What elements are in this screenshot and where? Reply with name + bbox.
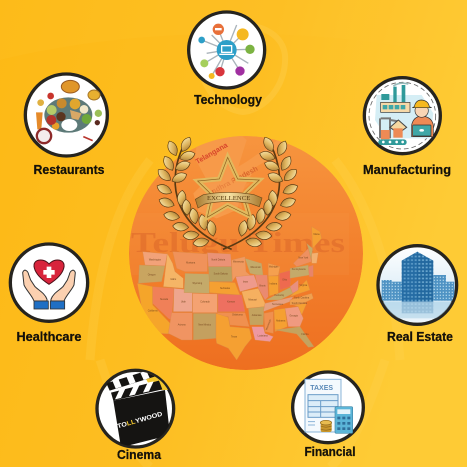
icon: manufacturing bbox=[364, 78, 440, 154]
USA map: Georgia bbox=[290, 315, 298, 318]
right hand bbox=[51, 270, 75, 301]
USA map: Minnesota bbox=[233, 261, 244, 264]
label: Manufacturing: Manufacturing bbox=[363, 163, 451, 177]
label: Restaurants: Restaurants bbox=[34, 163, 105, 177]
icon: healthcare bbox=[10, 244, 88, 321]
USA map: Ohio bbox=[282, 280, 288, 282]
USA map: Texas bbox=[231, 336, 238, 338]
USA map: Mississippi bbox=[266, 319, 272, 331]
USA map: Utah bbox=[181, 301, 186, 304]
left hand bbox=[23, 270, 47, 301]
Telugu states map bbox=[194, 136, 281, 218]
USA map: Iowa bbox=[243, 282, 248, 284]
central orange circle bbox=[129, 126, 363, 370]
laurel wreath bbox=[155, 135, 299, 249]
USA map: Wyoming bbox=[192, 283, 203, 285]
USA map: North Carolina bbox=[294, 296, 310, 299]
USA map bbox=[137, 227, 322, 360]
label: Healthcare: Healthcare bbox=[16, 330, 82, 344]
USA map: Virginia bbox=[299, 284, 308, 287]
right laurel branch bbox=[223, 135, 299, 249]
Telugu states map: Andhra Pradesh bbox=[205, 164, 260, 198]
USA map: Idaho bbox=[170, 279, 177, 281]
excellence ribbon bbox=[195, 192, 262, 208]
USA map: California bbox=[148, 310, 158, 313]
label: Financial: Financial bbox=[304, 445, 356, 459]
icon: restaurants bbox=[25, 74, 107, 156]
USA map: North Dakota bbox=[211, 259, 226, 262]
USA map: Kansas bbox=[227, 302, 236, 304]
watermark: Telugu Times bbox=[132, 232, 344, 254]
USA map: South Dakota bbox=[214, 273, 228, 276]
icon: cinema clapperboard: TOLLYWOOD bbox=[117, 411, 164, 430]
USA map: Arkansas bbox=[252, 314, 262, 317]
USA map: Kentucky bbox=[275, 294, 285, 297]
label: Real Estate: Real Estate bbox=[387, 330, 453, 344]
USA map: Missouri bbox=[248, 299, 257, 302]
USA map: Alabama bbox=[276, 319, 286, 322]
label: Cinema: Cinema bbox=[117, 448, 162, 462]
left laurel branch bbox=[155, 135, 232, 249]
icon: technology bbox=[189, 12, 265, 88]
USA map: New Mexico bbox=[198, 324, 212, 326]
excellence ribbon: EXCELLENCE bbox=[207, 195, 250, 202]
USA map: Louisiana bbox=[258, 336, 268, 338]
USA map: Arizona bbox=[178, 323, 186, 326]
USA map: Wisconsin bbox=[250, 267, 262, 269]
USA map: South Carolina bbox=[292, 302, 308, 305]
USA map: Florida bbox=[301, 333, 309, 336]
USA map: Oregon bbox=[148, 273, 156, 276]
USA map: Nebraska bbox=[220, 287, 231, 290]
label: Technology: Technology bbox=[194, 93, 262, 107]
USA map: New York bbox=[298, 257, 309, 260]
USA map: Michigan bbox=[269, 266, 279, 268]
gold star bbox=[198, 157, 259, 217]
USA map: Pennsylvania bbox=[292, 269, 306, 271]
icon: financial taxes: TAXES bbox=[310, 385, 333, 392]
USA map: Montana bbox=[186, 261, 196, 264]
USA map: Colorado bbox=[200, 301, 210, 304]
USA map: Nevada bbox=[160, 299, 169, 301]
USA map: Oklahoma bbox=[232, 314, 243, 316]
USA map: Washington bbox=[149, 259, 162, 262]
icon: cinema clapperboard bbox=[97, 369, 174, 447]
USA map: Maine bbox=[313, 234, 321, 236]
icon: financial taxes bbox=[293, 372, 363, 443]
watermark: Telugu Times: Telugu Times bbox=[131, 228, 345, 259]
icon: real estate bbox=[378, 246, 457, 324]
USA map: Indiana bbox=[269, 284, 278, 286]
USA map: Tennessee bbox=[272, 304, 284, 306]
Telugu states map: Telangana bbox=[194, 140, 230, 166]
USA map: Illinois bbox=[259, 286, 266, 288]
